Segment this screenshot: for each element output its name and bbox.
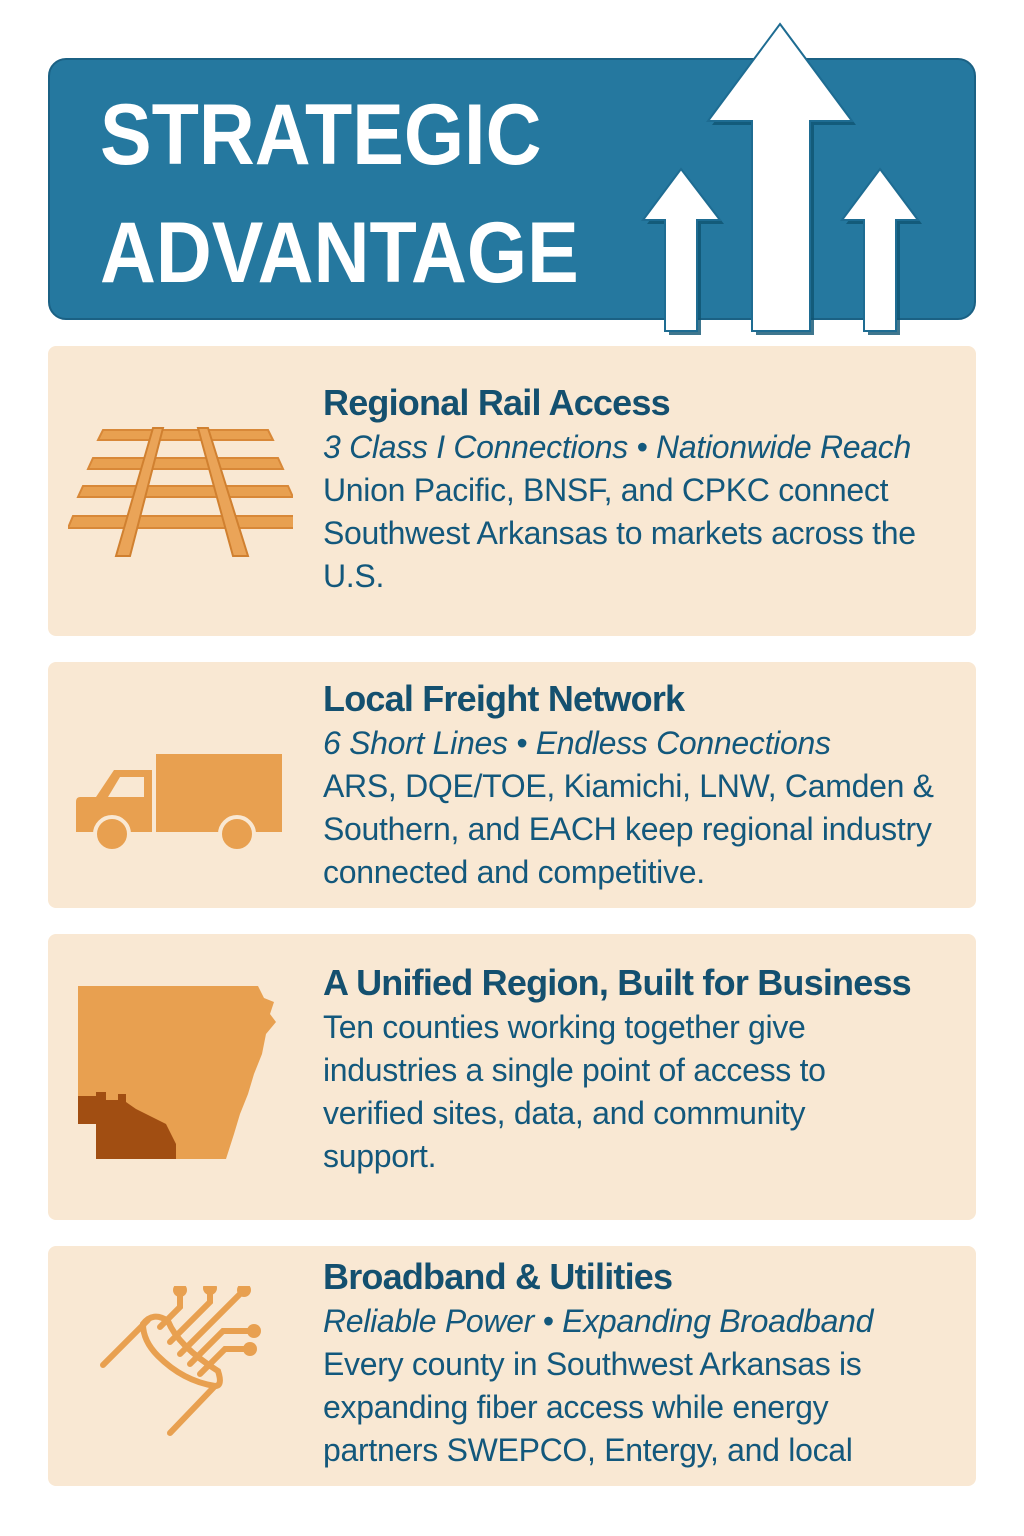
icon: fiber cable <box>100 1286 261 1436</box>
title <box>100 87 579 301</box>
icon: truck <box>76 754 282 849</box>
header banner <box>48 58 976 320</box>
text: broadband: expanding fiber access while energy <box>323 1389 828 1425</box>
panel: regional rail access <box>48 346 976 636</box>
text: rail: Southwest Arkansas to markets across the <box>323 515 916 551</box>
text: freight: ARS, DQE/TOE, Kiamichi, LNW, Camden & <box>323 768 934 804</box>
text: freight: 6 Short Lines • Endless Connections <box>323 725 831 761</box>
panel: local freight network <box>48 662 976 908</box>
icon: Arkansas map <box>78 986 276 1159</box>
icon: railroad tracks <box>68 427 293 557</box>
text: region: A Unified Region, Built for Business <box>323 962 911 1003</box>
text: region: support. <box>323 1138 436 1174</box>
text: freight: Southern, and EACH keep regional industry <box>323 811 932 847</box>
text: freight <box>323 678 934 890</box>
text: rail: Regional Rail Access <box>323 382 670 423</box>
text: rail: U.S. <box>323 558 384 594</box>
text: region: industries a single point of access to <box>323 1052 826 1088</box>
text: region: Ten counties working together give <box>323 1009 806 1045</box>
text: broadband: Reliable Power • Expanding Broadband <box>323 1303 873 1339</box>
text: broadband: Broadband & Utilities <box>323 1256 672 1297</box>
text: freight: connected and competitive. <box>323 854 705 890</box>
text: broadband <box>323 1256 874 1468</box>
text: broadband: Every county in Southwest Arkansas is <box>323 1346 862 1382</box>
text: rail: Union Pacific, BNSF, and CPKC connect <box>323 472 888 508</box>
text: freight: Local Freight Network <box>323 678 684 719</box>
text: rail <box>323 382 916 594</box>
title: STRATEGIC <box>100 87 541 183</box>
icon: rising arrows <box>642 22 922 335</box>
title: ADVANTAGE <box>100 205 579 301</box>
text: region: verified sites, data, and community <box>323 1095 805 1131</box>
panel: unified region <box>48 934 976 1220</box>
text: broadband: partners SWEPCO, Entergy, and local <box>323 1432 853 1468</box>
text: region <box>323 962 911 1174</box>
text: rail: 3 Class I Connections • Nationwide Reach <box>323 429 911 465</box>
panel: broadband & utilities <box>48 1246 976 1486</box>
